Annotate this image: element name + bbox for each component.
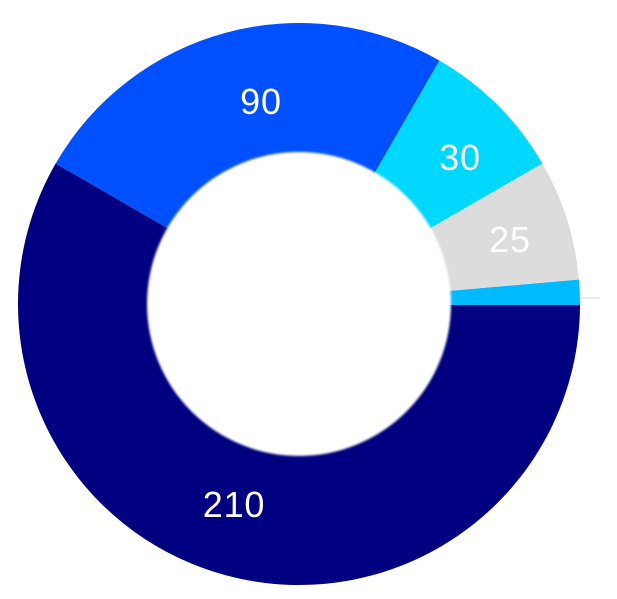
segment: 210 navy bbox=[18, 164, 580, 585]
donut hole bbox=[147, 152, 451, 456]
label: 25: 25 bbox=[489, 219, 531, 260]
label: 90: 90 bbox=[240, 81, 282, 122]
segment: 30 cyan bbox=[299, 61, 542, 304]
label: 210: 210 bbox=[203, 484, 265, 525]
segment: 5 light blue bbox=[299, 280, 580, 306]
segment: 25 grey bbox=[299, 164, 579, 304]
label: 30: 30 bbox=[439, 137, 481, 178]
segment: 90 blue bbox=[56, 23, 440, 304]
